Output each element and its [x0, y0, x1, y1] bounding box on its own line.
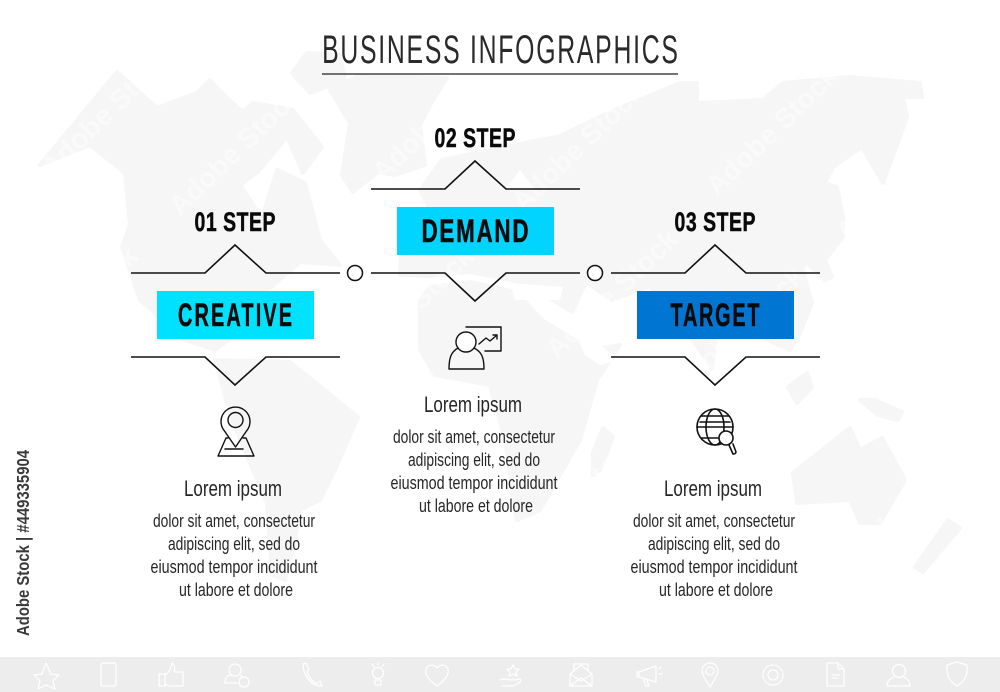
- icon: telephone: [303, 663, 322, 686]
- icon: star: [34, 663, 59, 689]
- icon: user check: [225, 664, 249, 687]
- map gaps: [505, 170, 620, 365]
- stock watermarks: Adobe Stock: [833, 436, 978, 577]
- step 02 heading: 02 STEP: [434, 123, 516, 153]
- body text: Lorem ipsum: [664, 476, 762, 501]
- panel: step 02 demand: [371, 123, 580, 516]
- stock watermarks: Adobe Stock: [540, 223, 685, 364]
- top chevron line: [371, 161, 580, 189]
- icon: hand with star: [500, 665, 521, 686]
- top chevron line: [611, 245, 820, 273]
- body text: dolor sit amet, consectetur: [153, 511, 315, 531]
- creative label: CREATIVE: [178, 297, 292, 333]
- icon: open envelope: [570, 664, 592, 686]
- footer icon strip: [0, 657, 1000, 692]
- icon: thumbs up: [159, 663, 183, 686]
- body text: ut labore et dolore: [179, 580, 293, 600]
- stock watermarks: Adobe Stock: [830, 106, 975, 247]
- stock watermarks: Adobe Stock: [43, 373, 188, 514]
- body text: [390, 392, 558, 516]
- connector dot right: [588, 266, 602, 280]
- stock watermarks: Adobe Stock: [666, 260, 811, 401]
- stock watermarks: Adobe Stock: [700, 60, 845, 201]
- body text: [150, 476, 318, 600]
- stock watermarks: Adobe Stock: [506, 76, 651, 217]
- body text: ut labore et dolore: [419, 496, 533, 516]
- step 01 heading: 01 STEP: [194, 207, 276, 237]
- icon: gear: [763, 665, 783, 685]
- icon: document: [827, 663, 844, 686]
- icon: megaphone: [637, 666, 662, 686]
- body text: Lorem ipsum: [424, 392, 522, 417]
- creative label: [157, 291, 314, 339]
- demand label: [397, 207, 554, 255]
- icon: location pin: [702, 663, 718, 687]
- stock watermarks: Adobe Stock: [35, 41, 180, 182]
- body text: ut labore et dolore: [659, 580, 773, 600]
- body text: eiusmod tempor incididunt: [630, 557, 798, 577]
- demand label: DEMAND: [421, 213, 529, 249]
- bottom chevron line: [131, 357, 340, 385]
- target label: TARGET: [671, 297, 759, 333]
- top chevron line: [131, 245, 340, 273]
- body text: [630, 476, 798, 600]
- stock watermarks: [0, 41, 1000, 577]
- target label: [637, 291, 794, 339]
- icon: presenter with chart: [449, 327, 501, 369]
- stock watermarks: Adobe Stock: [336, 240, 481, 381]
- vertical stock id text: Adobe Stock | #449335904: [13, 450, 33, 636]
- bottom chevron line: [611, 357, 820, 385]
- stock watermarks: Adobe Stock: [0, 240, 145, 381]
- icon: map pin: [218, 407, 254, 456]
- stock watermarks: Adobe Stock: [163, 80, 308, 221]
- body text: adipiscing elit, sed do: [408, 450, 540, 470]
- connector dot left: [348, 266, 362, 280]
- body text: dolor sit amet, consectetur: [393, 427, 555, 447]
- stock watermarks: Adobe Stock: [503, 426, 648, 567]
- icon: shield: [947, 662, 967, 686]
- step 03 heading: 03 STEP: [674, 207, 756, 237]
- world map background: [40, 53, 960, 580]
- panel: step 01 creative: [131, 207, 340, 600]
- bottom chevron line: [371, 273, 580, 301]
- title: BUSINESS INFOGRAPHICS: [322, 28, 678, 73]
- stock watermarks: Adobe Stock: [366, 46, 511, 187]
- panel: step 03 target: [611, 207, 820, 600]
- body text: adipiscing elit, sed do: [648, 534, 780, 554]
- icon: phone device: [101, 663, 116, 686]
- icon: heart: [426, 665, 448, 686]
- icon: light bulb: [372, 663, 384, 685]
- body text: eiusmod tempor incididunt: [150, 557, 318, 577]
- body text: adipiscing elit, sed do: [168, 534, 300, 554]
- body text: Lorem ipsum: [184, 476, 282, 501]
- icon: user: [887, 664, 910, 686]
- icon: globe with magnifier: [697, 409, 736, 454]
- body text: dolor sit amet, consectetur: [633, 511, 795, 531]
- body text: eiusmod tempor incididunt: [390, 473, 558, 493]
